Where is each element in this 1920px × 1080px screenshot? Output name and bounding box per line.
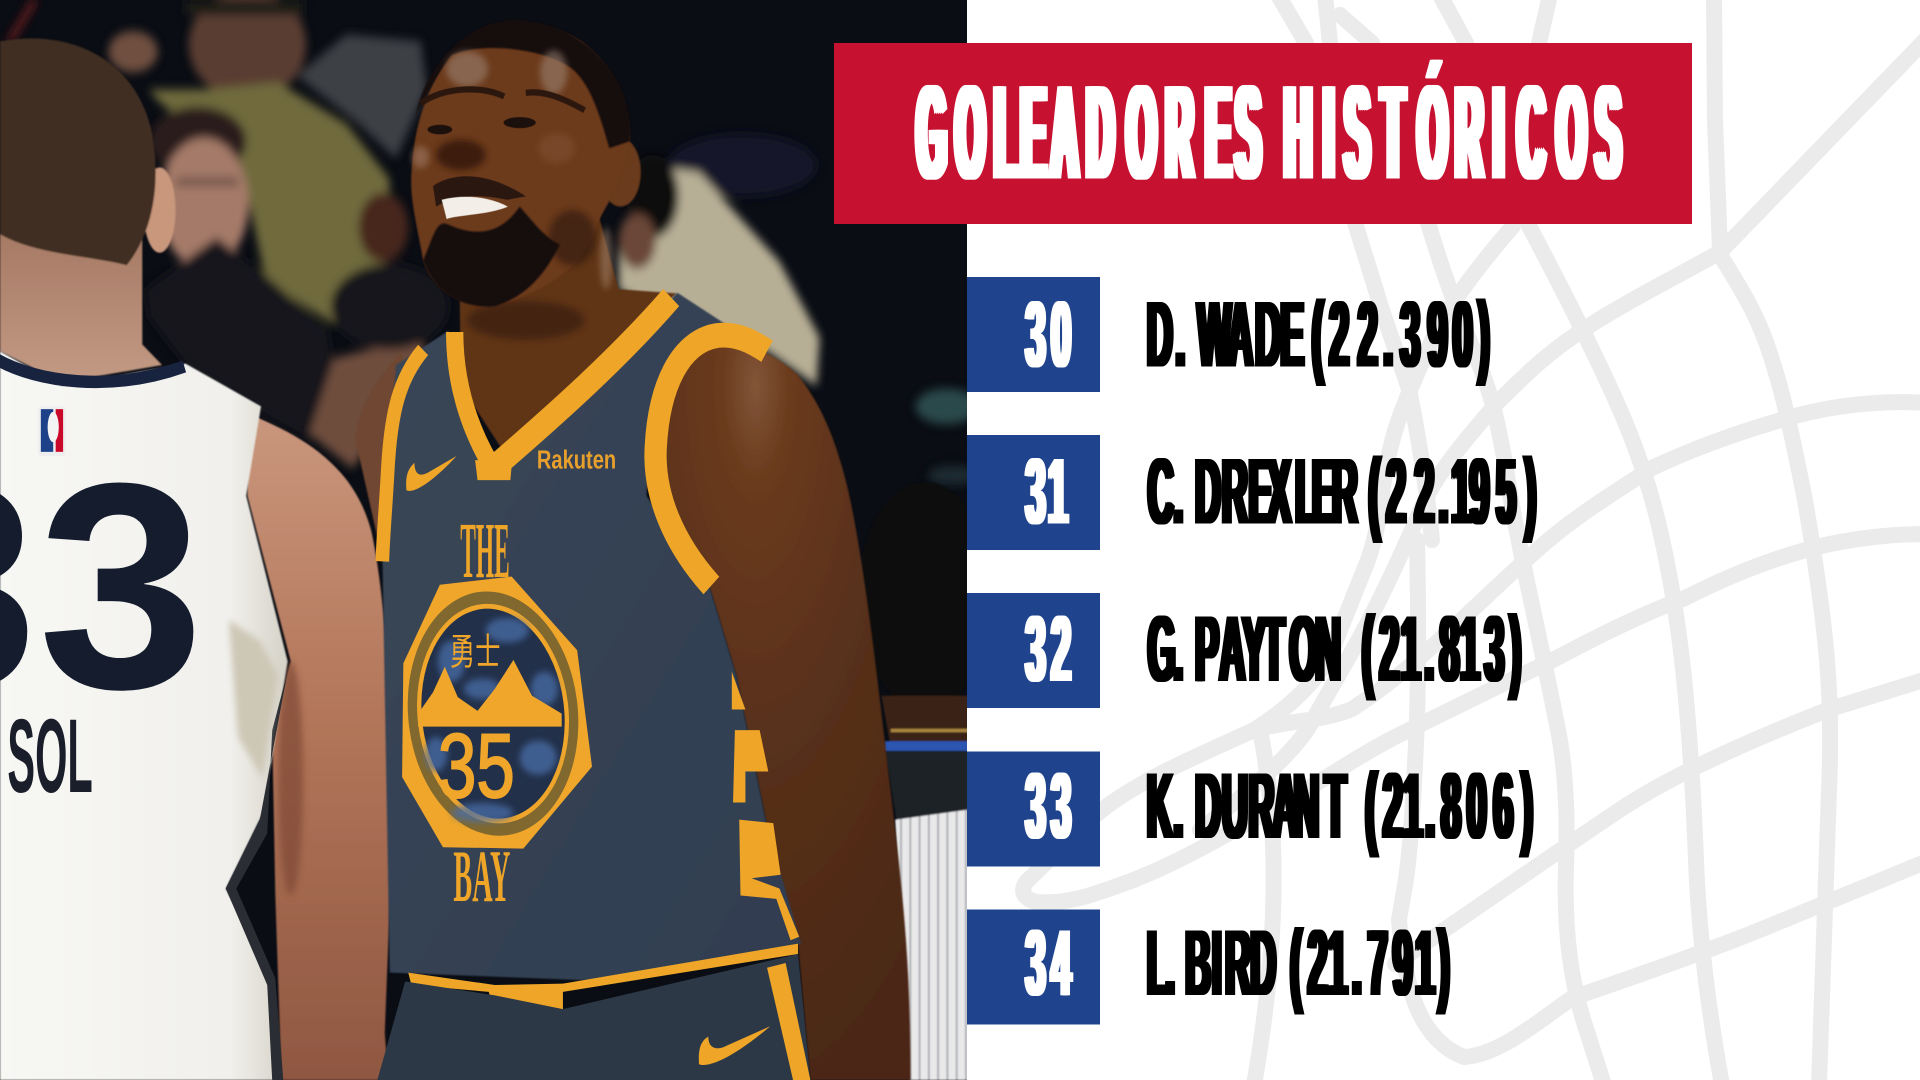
referee behind players [881, 482, 967, 1080]
rank badge 31: 31 [1026, 440, 1068, 545]
crowd background [0, 0, 977, 1080]
name and points: G. PAYTON (21.813) [1148, 598, 1521, 702]
player: Kevin Durant [356, 20, 911, 1080]
ranking row 30: D. Wade [967, 277, 1490, 392]
shorts [377, 954, 810, 1080]
Durant left shoulder [356, 351, 402, 551]
player: Marc Gasol: SOL [7, 698, 93, 815]
Durant neck [460, 207, 677, 448]
ranking row 31: C. Drexler [967, 435, 1536, 550]
name and points: D. WADE (22.390) [1147, 283, 1490, 388]
badge number 35: 35 [438, 716, 515, 817]
badge: Golden Gate 35 [394, 577, 592, 849]
jersey orange trim [382, 298, 799, 1011]
player: Kevin Durant: THE [460, 507, 510, 595]
Durant right arm [643, 341, 911, 1080]
Gasol arm [247, 413, 393, 1080]
ranking row 33: K. Durant [967, 752, 1533, 866]
player: Marc Gasol [0, 38, 393, 1080]
photo: Kevin Durant and Marc Gasol on court [0, 0, 992, 1080]
rank badge 31 [967, 435, 1100, 550]
swoosh upper [406, 456, 457, 491]
background basketball net pattern [1023, 0, 1920, 1080]
Durant jersey [382, 293, 801, 982]
rank badge 30 [967, 277, 1100, 392]
swoosh lower [699, 1026, 770, 1065]
Gasol neck and head [0, 38, 176, 382]
ranking row 34: L. Bird [967, 910, 1450, 1024]
rank badge 34: 34 [1026, 912, 1071, 1016]
rank badge 32: 32 [1026, 598, 1071, 702]
background white panel [967, 0, 1920, 1080]
name and points: L. BIRD (21.791) [1147, 912, 1450, 1016]
Durant head [411, 20, 641, 307]
rank badge 32 [967, 593, 1100, 708]
title text: GOLEADORES HISTÓRICOS [917, 57, 1621, 207]
title banner [834, 43, 1692, 224]
rank badge 33 [967, 752, 1100, 866]
name and points: C. DREXLER (22.195) [1148, 440, 1536, 545]
NBA logo [40, 409, 64, 452]
name and points: K. DURANT (21.806) [1147, 755, 1533, 859]
Rakuten sponsor: Rakuten [537, 445, 616, 475]
rank badge 33: 33 [1026, 755, 1071, 859]
badge Chinese characters: 勇士 [450, 632, 500, 673]
rank badge 34 [967, 910, 1100, 1024]
player: Kevin Durant: BAY [453, 836, 510, 918]
rank badge 30: 30 [1026, 283, 1071, 388]
ranking row 32: G. Payton [967, 593, 1521, 708]
Gasol jersey [0, 351, 288, 1080]
